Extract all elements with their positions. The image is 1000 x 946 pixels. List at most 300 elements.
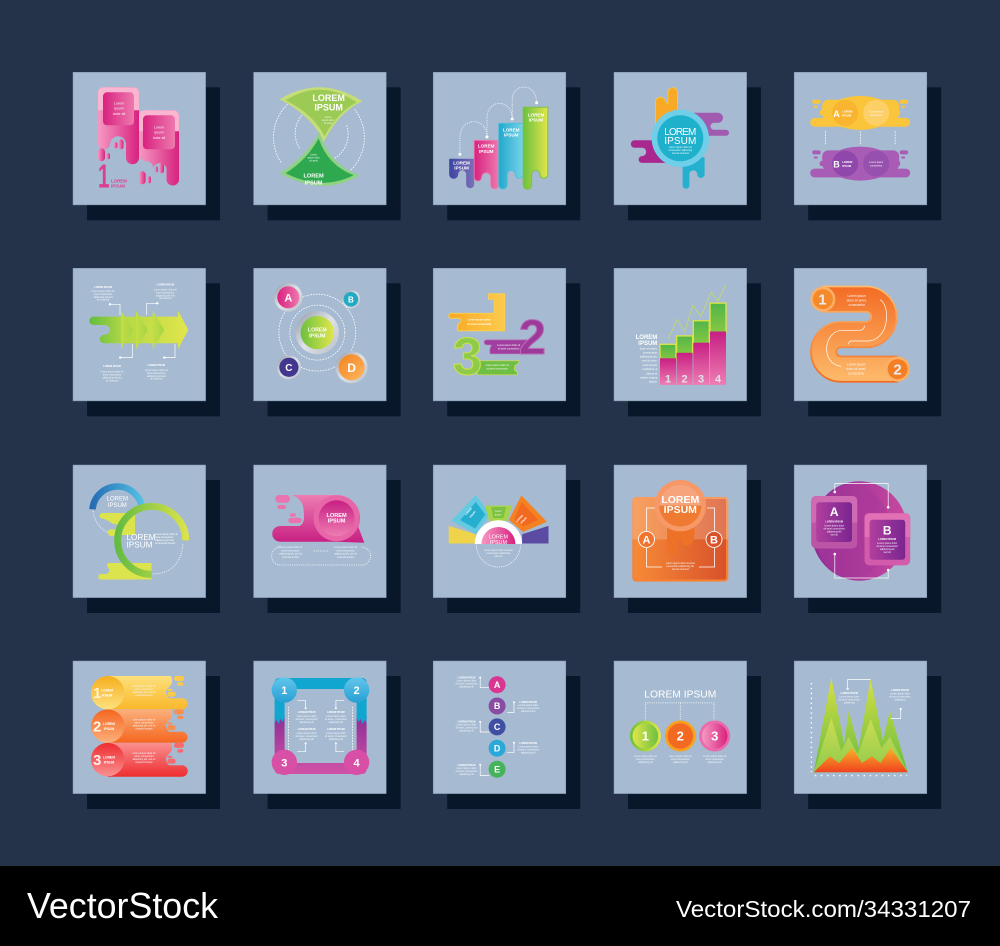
band 1: IPSUM	[102, 694, 112, 698]
circle D: D	[494, 743, 501, 753]
large title and text: do eiusmod tempor	[155, 542, 176, 545]
upper fan: ipsum dolor	[322, 119, 334, 122]
frame	[275, 678, 367, 774]
corner 3	[272, 750, 297, 775]
yellow blob upper	[100, 513, 135, 536]
text centre: sit amet consectetur	[838, 698, 860, 702]
text bottom left: do eiusmod	[106, 379, 119, 382]
green blade: Lorem	[495, 510, 502, 513]
heading: LOREM IPSUM	[644, 689, 716, 701]
captions	[634, 755, 726, 764]
small title: IPSUM	[108, 503, 127, 509]
panel 6: chevron arrow	[73, 268, 220, 416]
card B: LOREM IPSUM	[878, 538, 896, 541]
connectors	[846, 680, 902, 718]
band 1: adipiscing elit, sed do	[133, 691, 156, 694]
ribbon 1: Lorem ipsum dolor	[468, 319, 491, 322]
circle 1	[630, 720, 661, 752]
text bottom: dolor sit amet,	[846, 367, 866, 371]
text D: Lorem ipsum dolor	[518, 746, 538, 748]
text E: adipiscing elit	[459, 773, 474, 776]
bubble body	[272, 495, 364, 543]
text block: IPSUM	[638, 341, 657, 347]
card B: sed do	[884, 551, 891, 554]
dotted arcs	[460, 87, 537, 154]
upper fan: Lorem	[325, 116, 331, 119]
main circle	[652, 110, 709, 167]
bar 4: IPSUM	[529, 117, 543, 122]
text top right: Lorem ipsum dolor sit	[154, 288, 177, 291]
yellow blade	[449, 526, 476, 544]
circle D	[489, 740, 506, 757]
text right	[889, 689, 911, 702]
corner 4: 4	[354, 757, 361, 769]
text block: dolor sit amet,	[640, 346, 658, 350]
lower fan	[280, 132, 360, 186]
upper fan	[280, 87, 363, 142]
band 3: Lorem ipsum dolor sit	[133, 752, 156, 755]
ribbon 3: Lorem ipsum dolor sit	[486, 364, 509, 367]
corner 1	[272, 677, 297, 703]
text right: sit amet consectetur	[889, 696, 911, 698]
corner 2: 2	[354, 685, 360, 697]
text left: Lorem ipsum dolor sit	[279, 546, 302, 549]
text centre	[838, 692, 860, 704]
text B: Lorem ipsum dolor	[518, 704, 538, 707]
text E: LOREM IPSUM	[458, 764, 475, 767]
purple blob B: IPSUM	[842, 164, 852, 168]
inner texts: Lorem ipsum dolor	[326, 715, 346, 718]
upper fan: IPSUM	[314, 102, 343, 112]
panel 9: bar chart with rising arrow	[614, 268, 761, 416]
text centre: LOREM IPSUM	[840, 692, 858, 695]
bar 2: LOREM	[478, 144, 495, 149]
text B: adipiscing elit	[521, 710, 536, 713]
band 3: amet, consectetur	[134, 755, 154, 758]
band 3: LOREM	[103, 755, 115, 759]
road	[822, 299, 898, 369]
text bottom left	[101, 365, 124, 382]
footer logo text: VectorStock	[27, 885, 219, 926]
number 1 with label: 1	[98, 157, 110, 194]
drip box left	[98, 87, 139, 164]
text bottom right: amet consectetur	[147, 372, 166, 375]
centre circle	[296, 311, 339, 354]
text top right: amet consectetur	[156, 291, 175, 294]
bar numbers: 3	[698, 373, 704, 385]
panel 20: mountain area chart	[794, 661, 941, 809]
central half disk: LOREM	[489, 534, 508, 540]
panel 11: blue and green arcs	[73, 465, 220, 613]
band 1: 1	[93, 685, 101, 702]
panel 17: square frame with four corners	[254, 661, 401, 809]
text bottom left: amet consectetur	[103, 373, 121, 376]
lower fan: IPSUM	[305, 180, 323, 186]
ribbon 2	[484, 311, 546, 365]
footer url text: VectorStock.com/34331207	[676, 896, 971, 922]
dotted guides	[289, 707, 353, 750]
card A	[811, 496, 857, 548]
text B: LOREM IPSUM	[519, 701, 537, 704]
footer bar	[0, 866, 1000, 946]
bar 2	[474, 140, 499, 189]
bars	[660, 303, 726, 385]
lower fan: LOREM	[303, 173, 324, 179]
bubble body: IPSUM	[328, 518, 346, 524]
band 1	[91, 676, 188, 709]
arrow	[89, 311, 188, 349]
text right: Lorem ipsum dolor	[890, 692, 910, 696]
ribbon 2: 2	[519, 311, 546, 365]
text right: amet consectetur	[336, 549, 355, 552]
text right: adipiscing	[895, 698, 906, 702]
panel 7: orbit circles	[254, 268, 401, 416]
dotted capsule	[272, 547, 371, 565]
green blade: ipsum	[495, 514, 501, 516]
drip box right	[139, 110, 179, 186]
panel 4: cyan drip circle	[614, 72, 761, 220]
bracket lines	[646, 508, 714, 567]
dashed orbit arcs	[274, 102, 364, 171]
band 3: adipiscing elit, sed do	[133, 758, 156, 761]
lower fan: Lorem	[310, 153, 317, 156]
circle A: A	[494, 680, 501, 690]
bar 3: LOREM	[503, 128, 520, 133]
connectors	[479, 677, 515, 776]
text bottom right: Lorem ipsum dolor sit	[145, 369, 168, 372]
connectors	[109, 302, 175, 359]
panel 10: orange S road	[794, 268, 941, 416]
yellow blob A: Lorem ipsum	[869, 110, 883, 113]
drip box left: Lorem	[114, 101, 124, 105]
bubble pills	[275, 495, 302, 523]
purple blob B: consectetur	[870, 165, 883, 168]
yellow blob A: A	[833, 109, 840, 119]
centre circle: IPSUM	[309, 333, 326, 339]
inner texts: sit amet, consectetur	[296, 718, 318, 721]
circle 1	[810, 287, 835, 312]
text top left: amet consectetur	[94, 293, 112, 296]
band 3	[91, 743, 188, 777]
card A: sed do	[831, 534, 838, 536]
text bottom	[846, 362, 866, 375]
captions: amet consectetur	[636, 758, 655, 761]
purple tab	[692, 113, 729, 136]
text centre: Lorem ipsum dolor	[839, 696, 859, 698]
large title and text	[126, 533, 178, 549]
main circle: Lorem ipsum dolor sit	[669, 146, 692, 149]
yellow blob A: IPSUM	[842, 113, 852, 117]
text centre: adipiscing	[844, 702, 855, 704]
text top: Lorem ipsum	[847, 294, 866, 298]
connector dots	[458, 101, 538, 156]
orange blade	[509, 495, 547, 532]
bar numbers	[665, 373, 722, 385]
panel 1: pink drip boxes	[73, 72, 220, 220]
green blade	[485, 506, 512, 521]
large title and text: LOREM	[126, 533, 156, 542]
text right	[334, 546, 358, 559]
drip box right: Lorem	[154, 125, 164, 129]
yellow blob A: consectetur	[870, 114, 883, 117]
inner texts: LOREM IPSUM	[327, 728, 345, 731]
text block: sed do eius-	[642, 359, 657, 363]
large title and text: amet consectetur	[155, 536, 174, 539]
panel 19: three numbered circles	[614, 661, 761, 809]
ribbon 3: sit amet consectetur	[486, 367, 508, 370]
text top	[847, 294, 867, 307]
green ring	[118, 506, 186, 574]
circle B	[489, 698, 506, 714]
dashed guide arcs	[93, 511, 183, 574]
text left: eiusmod tempor	[282, 556, 299, 559]
captions: adipiscing elit	[638, 761, 653, 764]
text D: adipiscing elit	[521, 752, 536, 754]
yellow blob A: LOREM	[842, 109, 853, 113]
text block: mod tempor	[642, 363, 657, 367]
circle 3: 3	[711, 728, 718, 744]
band 2: eiusmod tempor	[135, 727, 153, 730]
panel 5: yellow and purple blobs	[794, 72, 941, 220]
main circle: LOREM	[664, 127, 696, 138]
card	[632, 497, 728, 582]
text bottom: Lorem ipsum	[847, 362, 866, 366]
inner texts: LOREM IPSUM	[298, 711, 315, 714]
inner texts	[296, 711, 347, 741]
card A: adipiscing elit	[827, 530, 842, 534]
purple blob B	[810, 147, 910, 181]
circle B	[706, 531, 722, 547]
band 2: 2	[93, 718, 101, 735]
bar numbers: 4	[715, 373, 722, 385]
trend line	[668, 285, 726, 339]
text top right	[154, 284, 177, 300]
text block: adipiscing elit,	[640, 354, 658, 358]
inner texts: adipiscing elit	[299, 721, 314, 724]
caption: consectetur adipiscing elit,	[666, 565, 695, 568]
text bottom left: LOREM IPSUM	[103, 365, 121, 368]
text block: aliqua.	[649, 380, 658, 384]
circle A	[638, 531, 654, 547]
text bottom right: do eiusmod	[150, 377, 163, 380]
text bottom right: adipiscing elit sed	[147, 375, 166, 378]
text block: LOREM	[636, 335, 657, 341]
small title: LOREM	[107, 496, 128, 502]
text D: sit amet, consectetur	[517, 748, 539, 752]
bar 1: IPSUM	[454, 166, 469, 171]
centre circle: LOREM	[308, 327, 327, 333]
inner texts: adipiscing elit	[329, 738, 343, 741]
bar 3	[499, 123, 523, 189]
text E	[455, 764, 478, 776]
text B: sit amet, consectetur	[517, 707, 539, 710]
axes dots	[811, 683, 907, 776]
upper fan: LOREM	[312, 93, 345, 103]
lower fan: ipsum dolor	[307, 156, 320, 159]
circle B: B	[348, 295, 354, 304]
inner texts: LOREM IPSUM	[327, 711, 345, 714]
dashed half circle and text: elit sed	[495, 555, 503, 558]
text A: Lorem ipsum dolor	[457, 680, 477, 682]
captions: amet consectetur	[671, 758, 690, 761]
band 1: amet, consectetur	[134, 688, 154, 691]
drip box right: ipsum	[154, 131, 164, 135]
text A	[455, 676, 478, 688]
band 2: adipiscing elit, sed do	[133, 724, 156, 727]
card A: sit amet consectetur	[823, 528, 845, 530]
ribbon 3	[453, 327, 519, 386]
dotted tree	[645, 703, 714, 721]
text right: adipiscing elit, sed do	[334, 553, 358, 556]
band 1: Lorem ipsum dolor sit	[133, 685, 156, 688]
text top left: adipiscing elit sed	[94, 296, 113, 299]
text C: adipiscing elit	[459, 730, 474, 732]
inner texts: adipiscing elit	[299, 738, 314, 741]
corner 4	[344, 750, 369, 775]
band 2: amet, consectetur	[134, 721, 154, 724]
blue blade: LOREM	[465, 507, 473, 516]
captions: Lorem ipsum dolor sit	[703, 755, 726, 758]
caption: sed do eiusmod	[672, 568, 689, 571]
text right: Lorem ipsum dolor sit	[334, 546, 357, 549]
purple blob B: LOREM	[842, 160, 853, 164]
text top: dolor sit amet,	[847, 298, 867, 302]
text top right: do eiusmod	[159, 297, 172, 300]
panel 12: pink speech bubble	[254, 465, 401, 613]
text top left: Lorem ipsum dolor sit	[92, 290, 115, 293]
circle 3	[699, 720, 730, 752]
text left	[279, 546, 303, 559]
circle B	[342, 290, 360, 309]
central half disk: IPSUM	[490, 540, 507, 546]
inner texts: Lorem ipsum dolor	[326, 732, 346, 735]
text block: consectetur	[643, 350, 657, 354]
green peaks	[814, 678, 908, 772]
large title and text: adipiscing elit sed	[155, 539, 175, 542]
drip medallion: IPSUM	[664, 504, 697, 516]
text A: sit amet, consectetur	[455, 682, 478, 686]
captions: Lorem ipsum dolor sit	[634, 755, 657, 758]
purple blob B: B	[833, 160, 840, 170]
orange blade: LOREM	[516, 514, 524, 523]
circle 2	[885, 357, 910, 382]
text left: amet consectetur	[281, 549, 300, 552]
magenta tab	[631, 140, 674, 163]
corner 1: 1	[281, 685, 287, 697]
ribbon 3: 3	[453, 327, 482, 386]
text bottom right	[145, 364, 168, 380]
number 1 with label: LOREM	[111, 178, 127, 183]
band 2: IPSUM	[104, 727, 114, 731]
upper fan: sit amet	[324, 122, 333, 125]
circle D	[336, 351, 368, 383]
caption	[666, 562, 695, 571]
circle C: C	[285, 363, 293, 374]
inner texts: sit amet, consectetur	[296, 735, 318, 738]
circle A: A	[284, 292, 292, 304]
circle A	[489, 676, 506, 693]
circle D: D	[347, 361, 356, 375]
text block: dolore magna	[640, 375, 658, 379]
bar numbers: 2	[681, 373, 688, 385]
blue arch	[92, 487, 142, 509]
dashed half circle and text: consectetur adipiscing	[487, 552, 511, 555]
band 2: LOREM	[103, 722, 115, 726]
circle 1: 1	[818, 291, 827, 308]
band 1: eiusmod tempor	[135, 694, 153, 697]
text block: incididunt ut	[642, 367, 658, 371]
dashed orbits	[279, 294, 356, 371]
blue blade	[451, 495, 490, 534]
bar 2: IPSUM	[479, 149, 494, 154]
inner texts: sit amet, consectetur	[325, 718, 347, 721]
band 3: 3	[93, 752, 101, 769]
text C: Lorem ipsum dolor	[457, 724, 477, 726]
text bottom left: Lorem ipsum dolor sit	[101, 370, 124, 373]
circle B: B	[494, 701, 501, 711]
card B: adipiscing elit	[880, 548, 895, 551]
text right: LOREM IPSUM	[891, 689, 909, 692]
dashed half circle and text	[476, 545, 520, 567]
text C: sit amet, consectetur	[455, 726, 478, 730]
big circle	[811, 481, 907, 581]
ribbon 1: sit amet consectetur	[467, 323, 491, 326]
drip box right: dolor sit	[153, 136, 165, 140]
text top left	[92, 286, 115, 301]
text A: LOREM IPSUM	[458, 676, 475, 680]
circle 2: 2	[677, 728, 684, 744]
ribbon 2: Lorem ipsum dolor sit	[497, 344, 520, 347]
card A: LOREM IPSUM	[825, 520, 843, 524]
panel 3: rising drip bars	[433, 72, 580, 220]
captions: adipiscing elit	[708, 761, 722, 764]
inner texts: Lorem ipsum dolor	[297, 732, 317, 735]
main circle: consectetur adipiscing	[668, 149, 693, 152]
dashed links	[826, 131, 895, 145]
orange peaks	[814, 748, 908, 772]
main circle: IPSUM	[664, 136, 696, 147]
mid peaks	[814, 718, 908, 772]
connectors	[834, 484, 890, 578]
central half disk	[475, 520, 522, 546]
text C	[455, 720, 478, 732]
connectors	[297, 701, 344, 752]
card B	[864, 513, 910, 565]
purple blade	[522, 526, 548, 544]
circle C: C	[494, 722, 501, 732]
orange blade: IPSUM	[520, 517, 528, 525]
captions: amet consectetur	[706, 758, 724, 761]
lower fan: sit amet	[309, 159, 318, 162]
orange tab	[656, 88, 677, 124]
inner texts: sit amet, consectetur	[325, 735, 347, 738]
text top left: LOREM IPSUM	[94, 286, 112, 289]
text top right: adipiscing elit sed	[156, 294, 175, 297]
text A: adipiscing elit	[459, 686, 474, 688]
inner texts: LOREM IPSUM	[298, 728, 315, 731]
card A: A	[830, 505, 839, 519]
bar 1: LOREM	[453, 160, 470, 166]
text left: adipiscing elit, sed do	[279, 553, 303, 556]
bubble body: LOREM	[326, 513, 347, 519]
captions: Lorem ipsum dolor sit	[669, 755, 692, 758]
corner 3: 3	[281, 757, 287, 769]
large title and text: IPSUM	[126, 540, 153, 549]
band 3: IPSUM	[104, 760, 114, 764]
circle C	[489, 718, 506, 735]
circle 2	[665, 720, 696, 752]
bar 3: IPSUM	[504, 132, 519, 138]
